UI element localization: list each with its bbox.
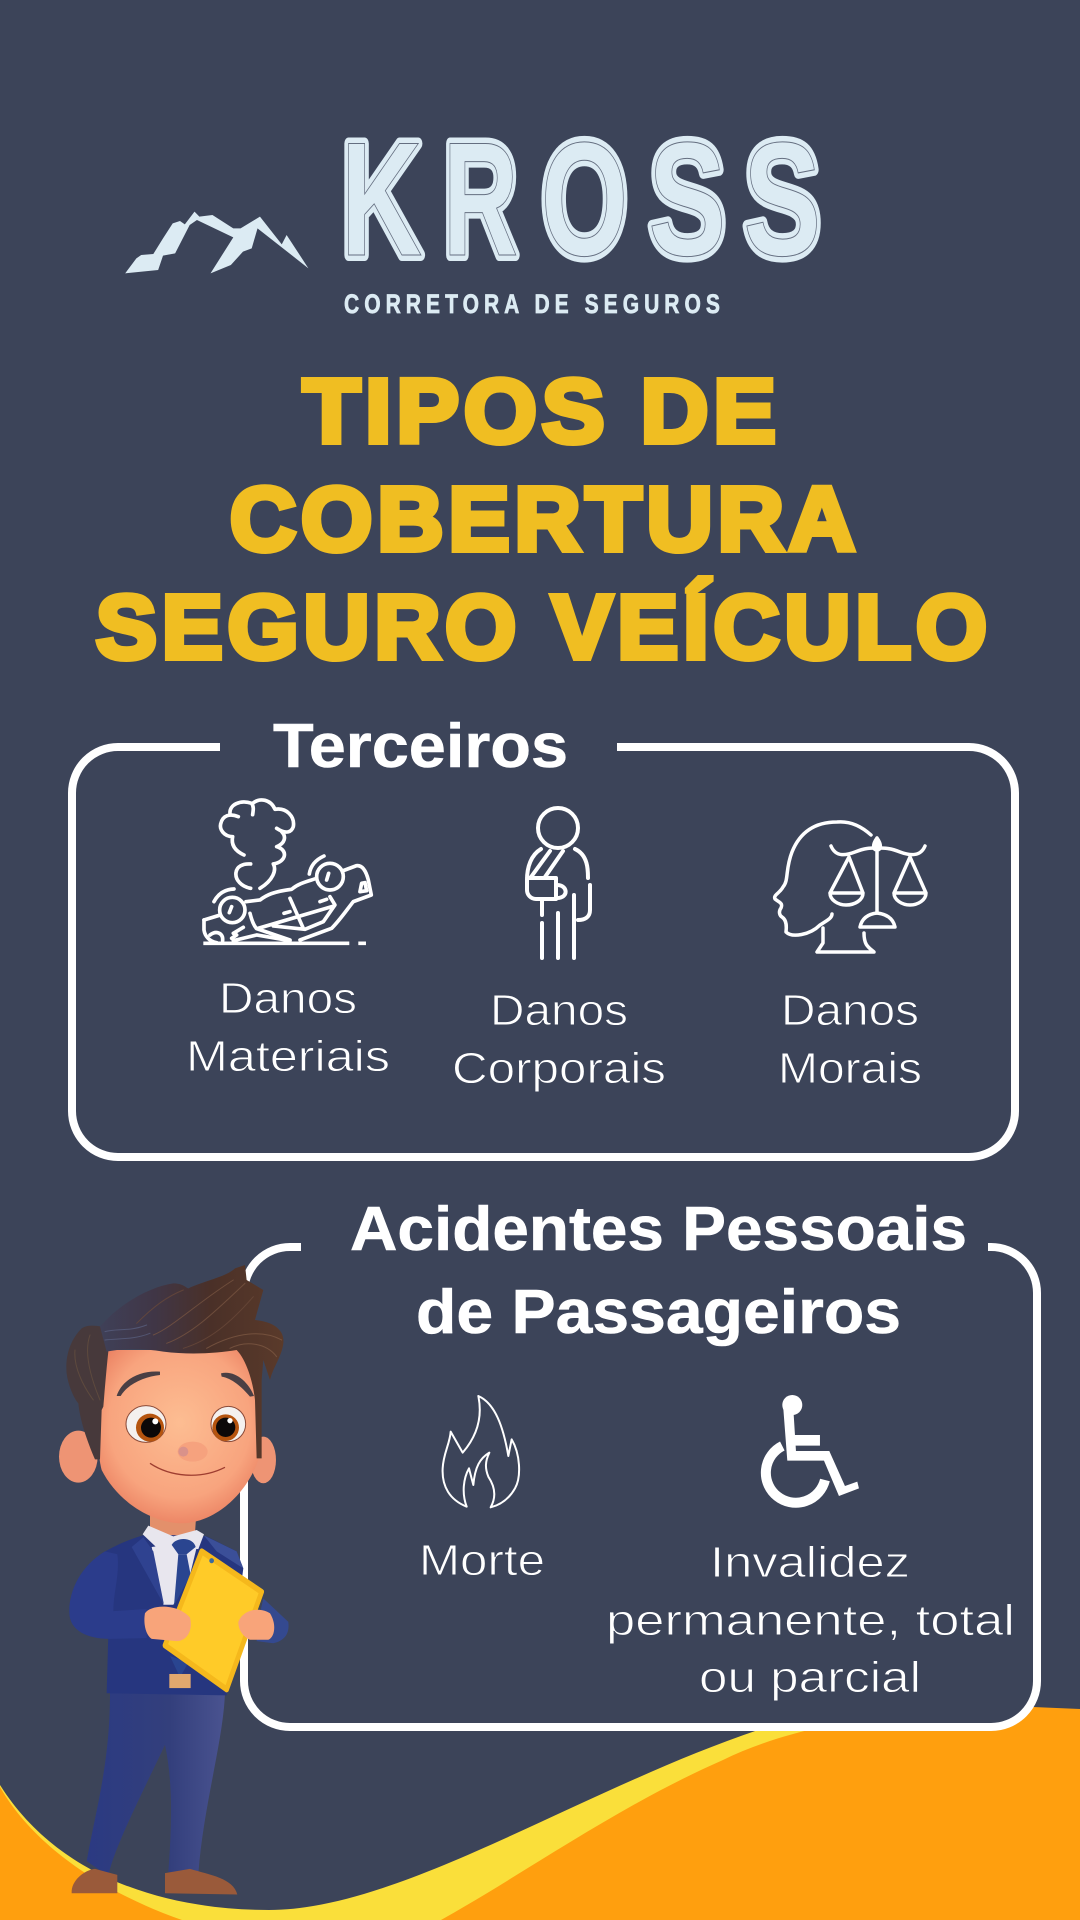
logo tagline: CORRETORA DE SEGUROS xyxy=(344,290,720,320)
panel: Acidentes Pessoais de Passageiros xyxy=(244,1195,1037,1727)
heading: Acidentes Pessoais de Passageiros: de Passageiros xyxy=(416,1278,901,1347)
label: Danos Morais: Danos xyxy=(781,986,919,1035)
label: Invalidez permanente, total ou parcial: permanente, total xyxy=(606,1596,1015,1645)
label: Morte: Morte xyxy=(419,1536,545,1585)
icon: flame xyxy=(443,1396,519,1507)
label: Danos Corporais: Danos xyxy=(490,986,628,1035)
logo wordmark KROSS: S xyxy=(744,109,821,290)
label: Danos Corporais: Corporais xyxy=(452,1044,666,1093)
title: SEGURO VEÍCULO xyxy=(96,577,992,678)
icon: head with scales of justice xyxy=(775,822,926,952)
character tie xyxy=(170,1539,196,1677)
logo wordmark KROSS: S xyxy=(744,109,821,290)
label: Danos Materiais: Materiais xyxy=(186,1032,390,1081)
label: Danos Morais xyxy=(778,986,922,1093)
logo wordmark KROSS: R xyxy=(443,109,518,290)
logo wordmark KROSS: S xyxy=(648,109,726,290)
logo xyxy=(125,109,821,320)
character jacket xyxy=(102,1534,243,1695)
character eyebrows xyxy=(117,1371,254,1397)
character shirt and collar xyxy=(143,1526,204,1605)
panel: Terceiros xyxy=(72,712,1015,1157)
logo wordmark KROSS: K xyxy=(341,109,422,290)
character right shoulder xyxy=(204,1536,243,1568)
title: TIPOS DE xyxy=(303,362,781,462)
logo wordmark KROSS: O xyxy=(541,109,628,290)
character legs xyxy=(87,1692,225,1876)
character: businessman with yellow clipboard xyxy=(59,1265,289,1895)
label: Danos Morais: Morais xyxy=(778,1044,922,1093)
character right arm xyxy=(257,1598,289,1643)
character hair xyxy=(66,1265,283,1459)
character clipboard xyxy=(165,1551,262,1689)
character nose xyxy=(178,1442,208,1462)
bottom wave: orange and yellow xyxy=(0,1690,1080,1920)
logo wordmark KROSS: S xyxy=(648,109,726,290)
character mouth xyxy=(150,1463,225,1475)
label: Invalidez permanente, total ou parcial: Invalidez xyxy=(710,1538,910,1587)
icon: person with arm sling xyxy=(527,808,590,958)
icon: mountains xyxy=(125,212,308,273)
label: Invalidez permanente, total ou parcial xyxy=(606,1538,1015,1702)
logo wordmark KROSS xyxy=(341,109,821,290)
character neck xyxy=(150,1506,197,1538)
title xyxy=(96,362,992,678)
label: Danos Materiais xyxy=(186,974,390,1081)
character body xyxy=(69,1506,289,1895)
heading: Terceiros: Terceiros xyxy=(273,712,568,781)
label: Danos Corporais xyxy=(452,986,666,1093)
character ears xyxy=(59,1431,276,1483)
character clipboard clip xyxy=(209,1558,214,1563)
character belt buckle xyxy=(169,1674,191,1688)
label: Invalidez permanente, total ou parcial: ou parcial xyxy=(699,1653,921,1702)
logo wordmark KROSS: K xyxy=(341,109,422,290)
character right eye xyxy=(211,1406,246,1442)
character hands xyxy=(144,1607,274,1641)
icon: overturned car with smoke xyxy=(203,800,371,943)
logo wordmark KROSS: R xyxy=(443,109,518,290)
heading: Acidentes Pessoais de Passageiros xyxy=(350,1195,967,1347)
heading: Acidentes Pessoais de Passageiros: Acidentes Pessoais xyxy=(350,1195,967,1264)
label: Danos Materiais: Danos xyxy=(219,974,357,1023)
character lapel xyxy=(132,1537,164,1605)
character left arm xyxy=(69,1551,147,1639)
icon: wheelchair xyxy=(766,1395,859,1503)
title: COBERTURA xyxy=(230,470,860,570)
character left eye xyxy=(126,1406,166,1442)
character head xyxy=(59,1265,283,1523)
character shoes xyxy=(72,1869,237,1895)
character face xyxy=(99,1350,261,1523)
logo wordmark KROSS: O xyxy=(541,109,628,290)
